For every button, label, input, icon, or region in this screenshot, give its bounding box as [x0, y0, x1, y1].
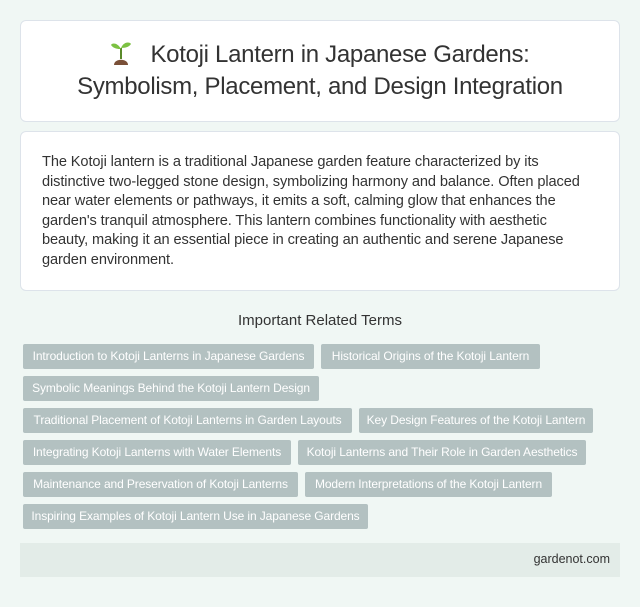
- tag 10: Inspiring Examples of Kotoji Lantern Use in Japanese Gardens: [31, 509, 360, 523]
- title: Kotoji Lantern in Japanese Gardens:: [150, 41, 530, 68]
- tag 6: Integrating Kotoji Lanterns with Water Elements: [33, 445, 281, 459]
- tag 8: [23, 472, 298, 497]
- tag 9: Modern Interpretations of the Kotoji Lantern: [315, 477, 542, 491]
- tag 2: [321, 344, 540, 369]
- tag 7: Kotoji Lanterns and Their Role in Garden Aesthetics: [307, 445, 577, 459]
- tag 1: Introduction to Kotoji Lanterns in Japanese Gardens: [33, 349, 304, 363]
- description text: [42, 154, 580, 268]
- section heading: Important Related Terms: [238, 312, 402, 329]
- icon: seedling: [111, 42, 131, 65]
- footer text: gardenot.com: [534, 552, 610, 566]
- tag 4: [23, 408, 352, 433]
- tag 2: Historical Origins of the Kotoji Lantern: [332, 349, 529, 363]
- description text: distinctive two-legged stone design, symbolizing harmony and balance. Often placed: [42, 174, 580, 190]
- title: Symbolism, Placement, and Design Integration: [77, 73, 563, 100]
- footer: [20, 543, 620, 577]
- tag 4: Traditional Placement of Kotoji Lanterns in Garden Layouts: [34, 413, 341, 427]
- title: [77, 41, 563, 100]
- tag 6: [23, 440, 291, 465]
- description text: near water elements or pathways, it emits a soft, calming glow that enhances the: [42, 193, 556, 209]
- tag 10: [23, 504, 368, 529]
- tag 7: [298, 440, 586, 465]
- tag 3: [23, 376, 319, 401]
- tag 9: [305, 472, 552, 497]
- tag 5: Key Design Features of the Kotoji Lantern: [367, 413, 585, 427]
- description text: garden environment.: [42, 252, 174, 268]
- header card: [20, 20, 620, 122]
- tag 3: Symbolic Meanings Behind the Kotoji Lantern Design: [32, 381, 310, 395]
- description text: The Kotoji lantern is a traditional Japanese garden feature characterized by its: [42, 154, 539, 170]
- description text: garden's tranquil atmosphere. This lantern combines functionality with aesthetic: [42, 213, 547, 229]
- tag 5: [359, 408, 593, 433]
- description card: [20, 131, 620, 291]
- tag 8: Maintenance and Preservation of Kotoji Lanterns: [33, 477, 288, 491]
- tag 1: [23, 344, 314, 369]
- description text: beauty, making it an essential piece in creating an authentic and serene Japanese: [42, 232, 563, 248]
